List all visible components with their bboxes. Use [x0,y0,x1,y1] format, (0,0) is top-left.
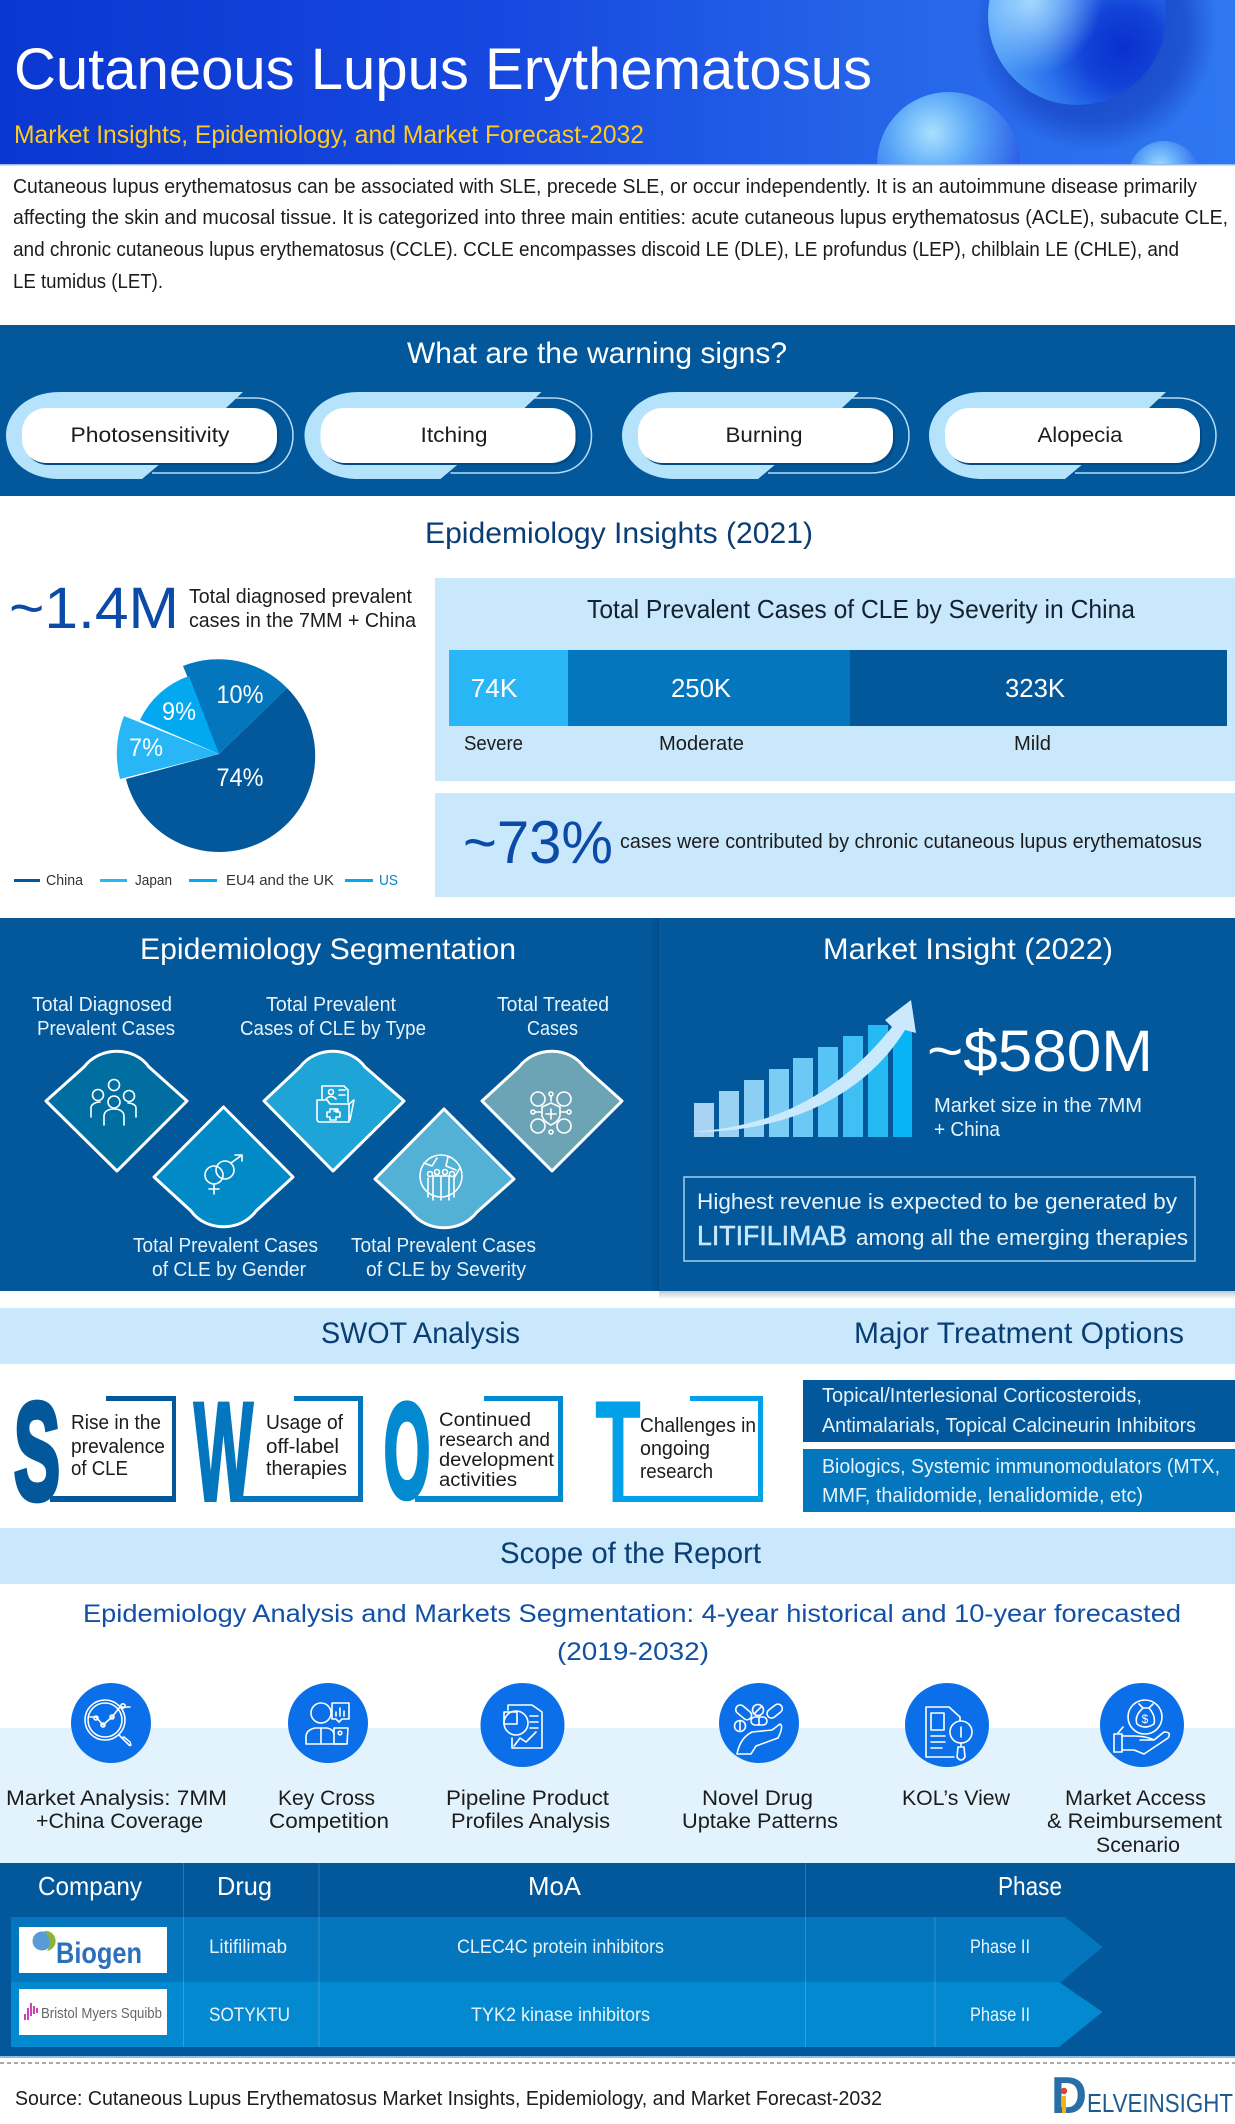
label: by type: Total Prevalent [266,994,396,1016]
SWOT: weakness: therapies [266,1458,347,1480]
scope icon: KOL view [905,1683,989,1767]
scope label: KOL: KOL’s View [902,1787,1011,1810]
panel: 73% callout [435,793,1235,897]
label: by type: Cases of CLE by Type [240,1018,426,1040]
SWOT: strength: S [14,1375,60,1529]
treatment box: topical: Topical/Interlesional Corticosteroids, [822,1385,1142,1407]
scope icon: pipeline product [480,1683,564,1767]
scope label: pipeline [446,1787,610,1833]
logo: DelveInsight: D [1051,2067,1087,2124]
stacked bar: 74K [470,673,518,703]
panel: severity in China: Total Prevalent Cases of CLE by Severity in China [587,594,1136,624]
row 1 text: Phase II [970,1937,1030,1958]
pie chart [117,659,315,852]
row 1 text: Litifilimab [209,1937,287,1958]
scope icon: market access: $ [1142,1712,1149,1726]
diamond icon: globe and people [375,1109,514,1228]
row 2 text: SOTYKTU [209,2005,290,2026]
scope label: market analysis [6,1787,227,1833]
SWOT: opportunity: research and [439,1430,550,1451]
SWOT: opportunity [384,1377,563,1526]
table header: MoA [528,1871,582,1901]
title: Cutaneous Lupus Erythematosus [14,37,872,102]
diamond icon: diagnosed people [46,1051,187,1171]
label: diagnosed: Prevalent Cases [37,1018,175,1040]
panel: 73% callout: ~73% [463,809,613,876]
table header [38,1871,1062,1901]
label: by severity: of CLE by Severity [366,1259,526,1281]
scope subtitle [83,1600,1181,1666]
SWOT: weakness: Usage of [266,1412,343,1434]
pill: Photosensitivity [6,392,293,479]
label: by severity: Total Prevalent Cases [351,1235,536,1257]
stat: 1.4M diagnosed cases [9,576,417,641]
heading band: SWOT and treatment: SWOT Analysis [321,1317,520,1350]
callout: highest revenue: Highest revenue is expected to be generated by [697,1189,1177,1214]
pie chart: 7% [129,734,163,762]
scope label: competition [269,1787,389,1833]
heading band: SWOT and treatment: Major Treatment Options [854,1317,1184,1350]
pie chart: 10% [216,681,264,709]
heading: epidemiology insights: Epidemiology Insights (2021) [425,517,813,550]
stat: 1.4M diagnosed cases: ~1.4M [9,576,179,641]
callout: highest revenue [684,1177,1195,1261]
header banner [0,0,1235,166]
label: by gender: Total Prevalent Cases [133,1235,318,1257]
row 2 text: TYK2 kinase inhibitors [471,2005,650,2026]
pie chart: 9% [162,698,196,726]
pill: Itching: Itching [420,424,488,447]
scope label: market analysis: Market Analysis: 7MM [6,1787,227,1810]
table header: Company [38,1871,142,1901]
scope label: pipeline: Pipeline Product [446,1787,609,1810]
logo: Bristol Myers Squibb [19,1989,167,2035]
pill: Burning: Burning [726,424,802,447]
stacked bar [449,650,1227,726]
panel: severity in China [435,578,1235,781]
logo: Bristol Myers Squibb: Bristol Myers Squibb [41,2005,162,2022]
scope icon: market access [1100,1683,1184,1767]
growth bar chart [691,1000,916,1137]
label: treated: Cases [527,1018,578,1040]
heading band: scope of the report: Scope of the Report [500,1537,762,1570]
treatment box: biologics: Biologics, Systemic immunomodulators (MTX, [822,1456,1220,1478]
intro text block: Cutaneous lupus erythematosus can be associated with SLE, precede SLE, or occur independently. It is an autoimmune disease primarily [13,176,1197,198]
pie legend: EU4 and the UK [226,872,334,889]
label: diagnosed [32,994,175,1040]
panel: market insight [650,918,1235,1299]
scope icon: key cross competition [288,1683,368,1763]
scope label: novel drug: Uptake Patterns [682,1810,838,1833]
scope label: market access: Market Access [1065,1787,1206,1810]
logo: DelveInsight [1051,2067,1233,2124]
row 2 arrow [11,1982,1102,2047]
treatment box: biologics: MMF, thalidomide, lenalidomide, etc) [822,1485,1143,1507]
SWOT: strength: Rise in the [71,1412,161,1434]
scope label: competition: Key Cross [278,1787,375,1810]
SWOT: threat [595,1370,763,1533]
stat: 1.4M diagnosed cases: Total diagnosed prevalent [189,586,412,608]
diamond icon: medical folder [264,1051,404,1171]
treatment box: topical [803,1380,1235,1442]
panel: market insight: Market size in the 7MM [934,1095,1142,1117]
treatment box: topical: Antimalarials, Topical Calcineurin Inhibitors [822,1415,1196,1437]
pie legend: China [46,872,84,889]
stat: 1.4M diagnosed cases: cases in the 7MM + China [189,610,417,632]
SWOT: opportunity: O [384,1377,430,1526]
SWOT: strength: prevalence [71,1436,165,1458]
scope label: market analysis: +China Coverage [36,1810,203,1833]
pill: Alopecia [929,392,1216,479]
SWOT: opportunity: development [439,1450,555,1471]
callout: highest revenue: LITIFILIMAB [697,1220,847,1251]
SWOT: threat: ongoing [640,1438,710,1460]
intro text block: LE tumidus (LET). [13,271,163,293]
pill: Burning [622,392,909,479]
heading: warning signs: What are the warning signs? [407,337,787,370]
SWOT: strength: of CLE [71,1458,128,1480]
scope subtitle: (2019-2032) [557,1638,709,1666]
pill: Itching [304,392,592,479]
SWOT: threat: T [595,1370,641,1533]
intro text block [13,176,1228,293]
label: by severity [351,1235,536,1281]
panel: severity in China: Severe [464,733,523,755]
pie legend: Japan [135,872,172,889]
panel: severity in China: Moderate [659,733,744,755]
row 1 arrow [11,1917,1102,1982]
intro text block: and chronic cutaneous lupus erythematosus (CCLE). CCLE encompasses discoid LE (DLE), LE profundus (LEP), chilblain LE (CHLE), and [13,239,1179,261]
pie legend [14,872,398,889]
SWOT: opportunity: Continued [439,1410,531,1431]
treatment box: biologics [803,1449,1235,1512]
light scope band [0,1728,1235,1863]
panel: epidemiology segmentation: Epidemiology Segmentation [140,933,516,966]
table header: Phase [998,1871,1062,1901]
panel: market insight: ~$580M [927,1019,1153,1084]
diamond icon: gender [154,1107,293,1227]
heading band: scope of the report [0,1528,1235,1584]
diamond icon: treated shield network [482,1051,622,1171]
row 1 text: CLEC4C protein inhibitors [457,1937,664,1958]
panel: warning signs [0,325,1235,496]
scope label: market access: Scenario [1096,1834,1180,1857]
scope icon: market analysis [71,1683,151,1763]
SWOT: weakness: off-label [266,1436,339,1458]
SWOT: threat: research [640,1461,713,1483]
pie chart: 74% [216,764,264,792]
scope icon: novel drug uptake [719,1683,799,1763]
SWOT: opportunity: activities [439,1470,517,1491]
table header: Drug [217,1871,272,1901]
source line: Source: Cutaneous Lupus Erythematosus Market Insights, Epidemiology, and Market Forecast-2032 [15,2088,882,2110]
panel: market insight: Market Insight (2022) [823,933,1113,966]
scope label: market access: & Reimbursement [1047,1810,1222,1833]
subtitle: Market Insights, Epidemiology, and Market Forecast-2032 [14,121,644,149]
logo: Biogen [19,1927,167,1973]
scope label: market access [1047,1787,1222,1857]
label: diagnosed: Total Diagnosed [32,994,172,1016]
scope subtitle: Epidemiology Analysis and Markets Segmentation: 4-year historical and 10-year forecasted [83,1600,1181,1628]
scope label: competition: Competition [269,1810,389,1833]
SWOT: threat: Challenges in [640,1415,756,1437]
callout: highest revenue: among all the emerging therapies [856,1225,1188,1250]
pill: Alopecia: Alopecia [1038,424,1123,447]
scope label: novel drug: Novel Drug [702,1787,813,1810]
pipeline table [0,1863,1235,2058]
label: by type [240,994,426,1040]
intro text block: affecting the skin and mucosal tissue. It is categorized into three main entities: acute cutaneous lupus erythematosus (ACLE), subacute CLE, [13,207,1228,229]
label: treated: Total Treated [497,994,609,1016]
stacked bar: 250K [671,673,732,703]
heading band: SWOT and treatment [0,1308,1235,1364]
label: by gender [133,1235,318,1281]
row 1 text [209,1937,1030,1958]
row 2 text [209,2005,1030,2026]
SWOT: strength [14,1375,176,1529]
row 2 text: Phase II [970,2005,1030,2026]
SWOT: weakness: W [194,1373,253,1530]
scope label: pipeline: Profiles Analysis [451,1810,610,1833]
panel: market insight: + China [934,1119,1001,1141]
pill: Photosensitivity: Photosensitivity [70,424,230,447]
panel: epidemiology segmentation [0,918,660,1291]
stacked bar: 323K [1005,673,1066,703]
pie legend: US [379,872,398,889]
panel: severity in China: Mild [1014,733,1051,755]
label: treated [497,994,609,1040]
panel: 73% callout: cases were contributed by chronic cutaneous lupus erythematosus [620,831,1202,853]
scope label: novel drug [682,1787,838,1833]
logo: Biogen: Biogen [56,1937,142,1970]
growth arrow [691,1000,916,1132]
label: by gender: of CLE by Gender [152,1259,306,1281]
